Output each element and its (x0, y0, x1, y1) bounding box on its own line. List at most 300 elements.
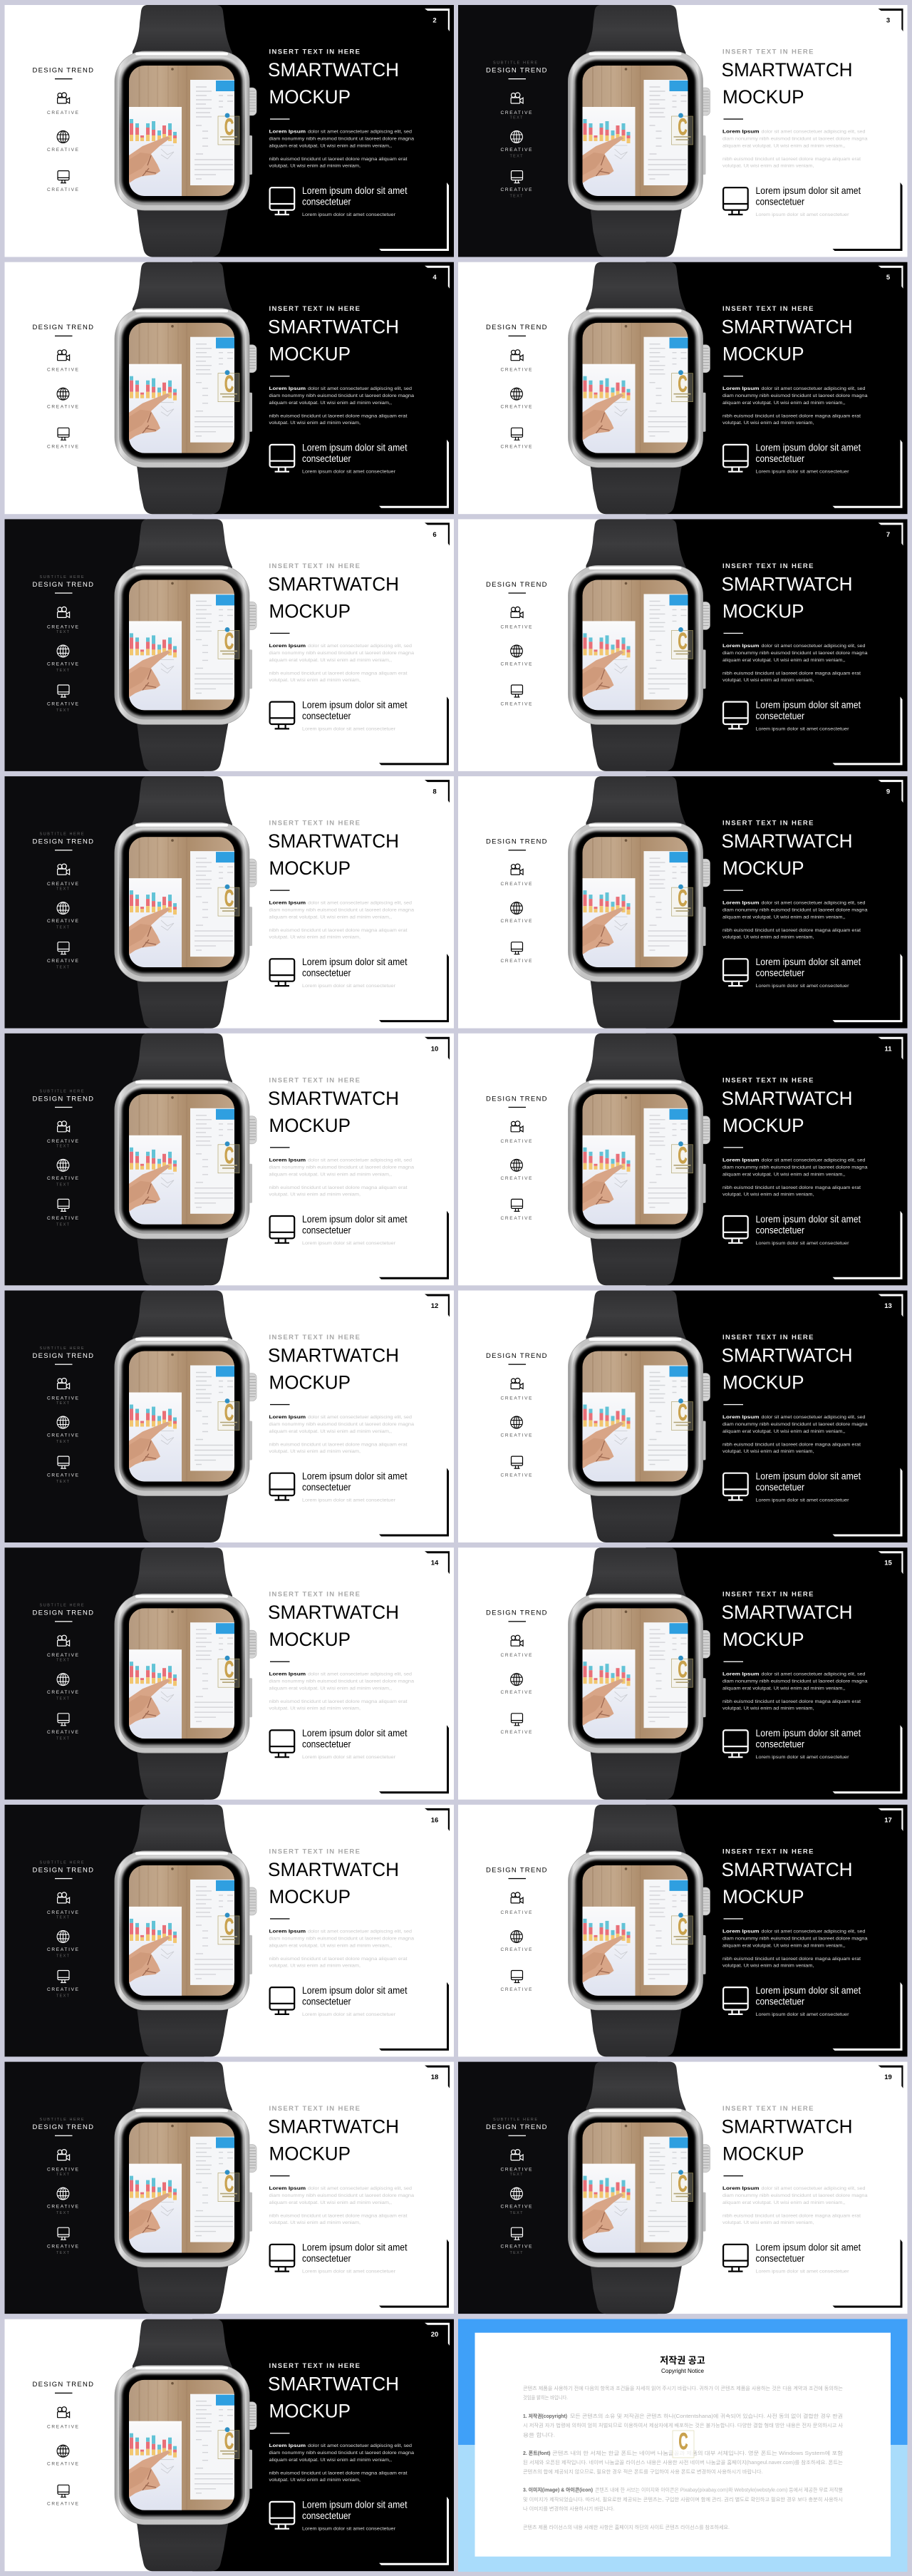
body text (269, 901, 414, 940)
body text: volutpat. Ut wisi enim ad minim veniam, (269, 421, 361, 426)
corner top right (878, 266, 903, 289)
title line 1: SMARTWATCH (268, 830, 399, 852)
title line 1: SMARTWATCH (721, 830, 852, 852)
body text: aliquam erat volutpat. Ut wisi enim ad minim veniam,, (722, 401, 846, 406)
slide background (458, 1805, 908, 2056)
callout: consectetuer (755, 195, 804, 207)
body text (722, 2186, 868, 2225)
intro paragraph (523, 2385, 844, 2401)
icon: video camera (511, 607, 523, 617)
icon: monitor (512, 1199, 523, 1211)
title line 1: SMARTWATCH (721, 1344, 852, 1366)
slide background (4, 519, 454, 771)
page number: 2 (432, 17, 437, 24)
slide 5 (458, 262, 908, 514)
left menu column (33, 833, 93, 970)
logo watermark: C (678, 1657, 687, 1682)
divider (270, 118, 289, 120)
slide background (458, 776, 908, 1029)
icon: video camera (58, 1379, 70, 1389)
body text: diam nonummy nibh euismod tincidunt ut laoreet dolore magna (722, 908, 868, 913)
notice subtitle: Copyright Notice (661, 2367, 704, 2374)
logo watermark: C (678, 2171, 687, 2197)
menu heading: DESIGN TREND (486, 838, 547, 846)
callout (755, 1727, 861, 1760)
title line 2: MOCKUP (722, 600, 804, 622)
body text: Lorem Ipsum (269, 1929, 306, 1934)
callout: Lorem ipsum dolor sit amet consectetuer (302, 984, 396, 989)
menu heading: DESIGN TREND (486, 2123, 547, 2131)
body text: volutpat. Ut wisi enim ad minim veniam, (269, 2220, 361, 2225)
body text: dolor sit amet consectetuer adipiscing elit, sed (308, 1672, 412, 1677)
body text: volutpat. Ut wisi enim ad minim veniam, (269, 1963, 361, 1968)
corner bottom right (832, 696, 902, 765)
logo watermark: C (678, 371, 687, 397)
title line 1: SMARTWATCH (268, 1602, 399, 1623)
logo watermark (671, 1398, 693, 1430)
label: CREATIVE (500, 148, 532, 153)
logo watermark (671, 2170, 693, 2202)
corner bottom right (379, 2497, 449, 2565)
corner bottom right (379, 954, 449, 1022)
menu heading: DESIGN TREND (33, 67, 93, 74)
icon: video camera (58, 2407, 70, 2418)
body text: dolor sit amet consectetuer adipiscing elit, sed (761, 1415, 866, 1420)
title line 2: MOCKUP (722, 344, 804, 365)
slide background (4, 262, 454, 514)
callout: Lorem ipsum dolor sit amet (755, 1470, 861, 1481)
smartwatch illustration (115, 262, 256, 514)
body text: nibh euismod tincidunt ut laoreet dolore magna aliquam erat (722, 1957, 861, 1962)
callout (302, 1213, 408, 1246)
body text (722, 1929, 868, 1968)
callout: consectetuer (755, 967, 804, 979)
label: CREATIVE (47, 624, 79, 629)
slide 15 (458, 1547, 908, 1800)
corner bottom right (832, 1725, 902, 1793)
corner top right (425, 1294, 450, 1317)
logo watermark (671, 1656, 693, 1687)
body text: aliquam erat volutpat. Ut wisi enim ad minim veniam,, (269, 1943, 392, 1948)
title line 1: SMARTWATCH (721, 1859, 852, 1880)
label: CREATIVE (500, 1139, 532, 1144)
left menu column (33, 1860, 93, 1998)
body text: volutpat. Ut wisi enim ad minim veniam, (269, 1706, 361, 1711)
body text: aliquam erat volutpat. Ut wisi enim ad minim veniam,, (722, 658, 846, 663)
body text: diam nonummy nibh euismod tincidunt ut laoreet dolore magna (722, 393, 868, 398)
logo watermark (671, 1913, 693, 1944)
menu heading: DESIGN TREND (33, 1609, 93, 1617)
eyebrow: INSERT TEXT IN HERE (269, 1334, 360, 1341)
section 2: 콘텐츠 내의 한 서체는 한글 폰트는 네이버 나눔글꼴과 제품의 대부 서체입니다. 영문 폰트는 Windows System에 포함 (552, 2450, 844, 2456)
label: CREATIVE (500, 1947, 532, 1952)
label: CREATIVE (500, 1690, 532, 1695)
body text: Lorem Ipsum (269, 386, 306, 391)
body text: Lorem Ipsum (722, 901, 760, 906)
sublabel: TEXT (56, 926, 70, 930)
body text: aliquam erat volutpat. Ut wisi enim ad minim veniam,, (722, 144, 846, 148)
callout: consectetuer (302, 1995, 351, 2006)
slide background (4, 1805, 454, 2056)
smartwatch illustration (115, 519, 256, 771)
menu heading: DESIGN TREND (33, 324, 93, 331)
title line 1: SMARTWATCH (268, 2116, 399, 2138)
callout: Lorem ipsum dolor sit amet (755, 956, 861, 967)
title line 1: SMARTWATCH (268, 573, 399, 594)
sublabel: TEXT (510, 115, 523, 120)
icon: monitor (512, 1456, 523, 1468)
callout: Lorem ipsum dolor sit amet consectetuer (755, 212, 849, 217)
logo watermark: C (678, 2428, 688, 2454)
title line 2: MOCKUP (269, 600, 351, 622)
icon: globe (57, 2445, 69, 2457)
body text: diam nonummy nibh euismod tincidunt ut laoreet dolore magna (269, 1422, 414, 1427)
callout: Lorem ipsum dolor sit amet consectetuer (755, 2270, 849, 2274)
body text: nibh euismod tincidunt ut laoreet dolore magna aliquam erat (269, 414, 408, 419)
divider (509, 2135, 526, 2136)
title line 2: MOCKUP (722, 2143, 804, 2165)
body text: aliquam erat volutpat. Ut wisi enim ad minim veniam,, (269, 1172, 392, 1177)
icon: monitor (58, 171, 69, 183)
icon: monitor large (723, 2245, 748, 2272)
icon: globe (511, 131, 522, 143)
body text: Lorem Ipsum (269, 1158, 306, 1163)
body text: aliquam erat volutpat. Ut wisi enim ad minim veniam,, (269, 2200, 392, 2205)
label: CREATIVE (47, 445, 79, 450)
eyebrow: INSERT TEXT IN HERE (722, 48, 814, 56)
callout: consectetuer (302, 195, 351, 207)
body text: volutpat. Ut wisi enim ad minim veniam, (722, 2220, 814, 2225)
eyebrow: INSERT TEXT IN HERE (269, 2362, 360, 2370)
label: CREATIVE (47, 110, 79, 115)
title line 2: MOCKUP (722, 1886, 804, 1907)
body text: nibh euismod tincidunt ut laoreet dolore magna aliquam erat (269, 1957, 408, 1962)
label: CREATIVE (500, 701, 532, 706)
logo watermark (671, 1141, 693, 1173)
smartwatch illustration (569, 776, 710, 1029)
body text: dolor sit amet consectetuer adipiscing elit, sed (761, 1929, 866, 1934)
menu heading: DESIGN TREND (33, 838, 93, 846)
logo watermark (671, 113, 693, 145)
callout (755, 699, 861, 731)
slide 7 (458, 519, 908, 771)
body text: Lorem Ipsum (722, 1672, 760, 1677)
callout (302, 1984, 408, 2017)
label: CREATIVE (47, 1730, 79, 1735)
subtitle: SUBTITLE HERE (40, 1089, 84, 1093)
page number: 4 (432, 274, 437, 282)
subtitle: SUBTITLE HERE (40, 833, 84, 837)
sublabel: TEXT (56, 2251, 70, 2255)
sublabel: TEXT (56, 669, 70, 673)
body text: nibh euismod tincidunt ut laoreet dolore magna aliquam erat (722, 157, 861, 162)
body text: Lorem Ipsum (722, 130, 760, 134)
icon: video camera (58, 1121, 70, 1132)
menu heading: DESIGN TREND (486, 1609, 547, 1617)
slide 19 (458, 2062, 908, 2314)
logo watermark (218, 627, 239, 659)
icon: globe (57, 388, 69, 400)
body text: dolor sit amet consectetuer adipiscing elit, sed (761, 2186, 866, 2191)
icon: monitor large (723, 445, 748, 472)
callout: Lorem ipsum dolor sit amet (755, 1213, 861, 1225)
slide 10 (4, 1034, 454, 1285)
body text: dolor sit amet consectetuer adipiscing elit, sed (761, 644, 866, 649)
body text: volutpat. Ut wisi enim ad minim veniam, (722, 1963, 814, 1968)
logo watermark (218, 113, 239, 145)
label: CREATIVE (500, 2205, 532, 2210)
icon: globe (511, 645, 522, 657)
divider (509, 1107, 526, 1108)
icon: monitor large (270, 2502, 294, 2529)
slide 6 (4, 519, 454, 771)
body text: volutpat. Ut wisi enim ad minim veniam, (269, 678, 361, 683)
body text: diam nonummy nibh euismod tincidunt ut laoreet dolore magna (269, 2451, 414, 2456)
callout: Lorem ipsum dolor sit amet (755, 442, 861, 453)
callout (302, 2499, 408, 2532)
subtitle: SUBTITLE HERE (493, 2118, 537, 2122)
slide background (458, 519, 908, 771)
smartwatch illustration (115, 1034, 256, 1285)
callout: Lorem ipsum dolor sit amet (302, 185, 408, 196)
callout (302, 442, 408, 475)
logo watermark: C (224, 114, 234, 140)
icon: monitor (512, 171, 523, 183)
page number: 5 (886, 274, 891, 282)
icon: monitor large (270, 187, 294, 215)
divider (509, 78, 526, 79)
body text: nibh euismod tincidunt ut laoreet dolore magna aliquam erat (722, 1443, 861, 1447)
label: CREATIVE (47, 148, 79, 153)
label: CREATIVE (47, 1947, 79, 1952)
icon: video camera (511, 350, 523, 361)
title line 1: SMARTWATCH (268, 1344, 399, 1366)
icon: monitor large (270, 1473, 294, 1500)
slide 20 (4, 2319, 454, 2571)
body text: diam nonummy nibh euismod tincidunt ut laoreet dolore magna (269, 137, 414, 141)
body text: Lorem Ipsum (722, 1158, 760, 1163)
page number: 3 (886, 17, 890, 24)
label: CREATIVE (500, 919, 532, 924)
corner bottom right (832, 1982, 902, 2051)
body text: nibh euismod tincidunt ut laoreet dolore magna aliquam erat (269, 1185, 408, 1190)
slide background (458, 1290, 908, 1542)
slide 11 (458, 1034, 908, 1285)
divider (270, 890, 289, 891)
logo watermark (671, 370, 693, 402)
label: CREATIVE (47, 1653, 79, 1658)
body text: aliquam erat volutpat. Ut wisi enim ad minim veniam,, (269, 1686, 392, 1691)
left menu column (486, 324, 547, 450)
body text: aliquam erat volutpat. Ut wisi enim ad minim veniam,, (722, 915, 846, 920)
logo watermark: C (224, 371, 234, 397)
callout: Lorem ipsum dolor sit amet consectetuer (302, 2270, 396, 2274)
eyebrow: INSERT TEXT IN HERE (722, 562, 814, 570)
callout: consectetuer (302, 967, 351, 979)
divider (724, 1404, 743, 1405)
label: CREATIVE (500, 187, 532, 192)
callout: Lorem ipsum dolor sit amet (302, 1470, 408, 1481)
title line 2: MOCKUP (269, 344, 351, 365)
icon: monitor (58, 685, 69, 697)
label: CREATIVE (47, 1473, 79, 1478)
smartwatch illustration (569, 1547, 710, 1800)
slide 17 (458, 1805, 908, 2056)
label: CREATIVE (47, 368, 79, 373)
callout: Lorem ipsum dolor sit amet consectetuer (302, 1755, 396, 1760)
logo watermark: C (224, 1400, 234, 1426)
callout: Lorem ipsum dolor sit amet (755, 1727, 861, 1738)
panel: copyright notice (458, 2319, 908, 2572)
sublabel: TEXT (510, 2211, 523, 2215)
callout: consectetuer (755, 453, 804, 464)
page number: 20 (431, 2331, 438, 2339)
corner bottom right (832, 954, 902, 1022)
body text: diam nonummy nibh euismod tincidunt ut laoreet dolore magna (269, 2193, 414, 2198)
page number: 12 (431, 1302, 438, 1310)
corner top right (878, 1037, 903, 1060)
notice title: 저작권 공고 (660, 2355, 705, 2366)
page number: 13 (884, 1302, 892, 1310)
smartwatch illustration (115, 2319, 256, 2571)
subtitle: SUBTITLE HERE (40, 1604, 84, 1608)
body text: dolor sit amet consectetuer adipiscing elit, sed (308, 1415, 412, 1420)
menu heading: DESIGN TREND (33, 1095, 93, 1103)
page number: 16 (431, 1816, 438, 1824)
logo watermark (218, 2427, 239, 2459)
closing paragraph: 콘텐츠 제품 라이선스의 내용 사례한 사항은 홈페이지 하단의 사이트 콘텐츠 라이선스를 참조하세요. (523, 2524, 730, 2530)
logo watermark: C (678, 885, 687, 911)
label: CREATIVE (500, 1910, 532, 1915)
icon: video camera (511, 1379, 523, 1389)
right content column (721, 1808, 903, 2051)
title line 2: MOCKUP (269, 1115, 351, 1136)
label: CREATIVE (500, 1987, 532, 1992)
smartwatch illustration (115, 1290, 256, 1542)
slide background (4, 776, 454, 1029)
corner bottom right (379, 2240, 449, 2308)
body text: volutpat. Ut wisi enim ad minim veniam, (722, 1706, 814, 1711)
icon: monitor (58, 2227, 69, 2240)
body text: dolor sit amet consectetuer adipiscing elit, sed (308, 130, 412, 134)
slide 14 (4, 1547, 454, 1800)
label: CREATIVE (47, 1396, 79, 1401)
eyebrow: INSERT TEXT IN HERE (722, 1334, 814, 1341)
icon: monitor large (270, 2245, 294, 2272)
label: CREATIVE (500, 1396, 532, 1401)
body text: Lorem Ipsum (722, 2186, 760, 2191)
label: CREATIVE (47, 959, 79, 964)
icon: monitor large (723, 959, 748, 986)
eyebrow: INSERT TEXT IN HERE (722, 1848, 814, 1855)
callout: consectetuer (302, 453, 351, 464)
body text: diam nonummy nibh euismod tincidunt ut laoreet dolore magna (722, 1679, 868, 1684)
smartwatch illustration (115, 1805, 256, 2056)
divider (270, 1147, 289, 1148)
body text (722, 644, 868, 683)
page number: 7 (886, 531, 890, 539)
page number: 19 (884, 2073, 892, 2081)
page number: 9 (886, 788, 890, 796)
section 1: 용을 합니다. (523, 2432, 555, 2438)
intro paragraph: 콘텐츠 제품을 사용하기 전에 다음의 항목과 조건들을 자세히 읽어 주시기 바랍니다. 귀하가 이 콘텐츠 제품을 사용하는 것은 다음 계약과 조건에 동의하는 (523, 2385, 844, 2391)
title line 1: SMARTWATCH (721, 316, 852, 338)
divider (509, 1364, 526, 1365)
body text: nibh euismod tincidunt ut laoreet dolore magna aliquam erat (269, 2214, 408, 2219)
icon: monitor (512, 2227, 523, 2240)
title line 1: SMARTWATCH (268, 2374, 399, 2395)
body text: volutpat. Ut wisi enim ad minim veniam, (722, 421, 814, 426)
body text (269, 1672, 414, 1711)
corner top right (425, 780, 450, 803)
section 2: 콘텐츠의 합에 제공되지 않으므로, 필요한 경우 적은 폰트를 구입하여 사용 폰트로 변경하여 사용하시기 바랍니다. (523, 2468, 763, 2475)
smartwatch illustration (569, 5, 710, 257)
left menu column (486, 838, 547, 964)
blue backdrop top (458, 2319, 908, 2445)
eyebrow: INSERT TEXT IN HERE (269, 1848, 360, 1855)
label: CREATIVE (47, 405, 79, 410)
icon: monitor large (723, 1473, 748, 1500)
callout (302, 185, 408, 217)
body text: diam nonummy nibh euismod tincidunt ut laoreet dolore magna (722, 1936, 868, 1941)
eyebrow: INSERT TEXT IN HERE (269, 820, 360, 828)
callout: consectetuer (755, 2252, 804, 2264)
label: CREATIVE (500, 445, 532, 450)
title line 2: MOCKUP (269, 2143, 351, 2165)
icon: monitor (58, 1970, 69, 1983)
icon: monitor large (270, 702, 294, 728)
corner top right (425, 1551, 450, 1574)
sublabel: TEXT (510, 194, 523, 198)
slide 13 (458, 1290, 908, 1542)
divider (724, 1661, 743, 1662)
body text (269, 1415, 414, 1454)
body text: diam nonummy nibh euismod tincidunt ut laoreet dolore magna (722, 1422, 868, 1427)
section 1: 시 저작권 자가 법령에 의하여 엄히 처벌되므로 이용하여서 제삼자에게 배포하는 것은 불가능합니다. 다양한 결합 형태 방안 내용은 전자 문의하시고 사 (523, 2422, 844, 2428)
right content column (268, 266, 450, 508)
label: CREATIVE (500, 405, 532, 410)
left menu column (33, 1604, 93, 1741)
logo watermark: C (224, 1657, 234, 1682)
icon: monitor large (723, 1730, 748, 1757)
menu heading: DESIGN TREND (486, 1095, 547, 1103)
callout: Lorem ipsum dolor sit amet (302, 1213, 408, 1225)
section 2: 2. 폰트(font) (523, 2451, 550, 2456)
menu heading: DESIGN TREND (486, 1866, 547, 1874)
icon: monitor (512, 942, 523, 954)
slide background (458, 2062, 908, 2314)
body text: Lorem Ipsum (269, 2443, 306, 2448)
left menu column (486, 1866, 547, 1992)
right content column (721, 1037, 903, 1279)
title line 2: MOCKUP (722, 1371, 804, 1393)
logo watermark: C (678, 1143, 687, 1168)
icon: globe (511, 1930, 522, 1942)
label: CREATIVE (47, 2245, 79, 2250)
right content column (268, 780, 450, 1022)
right content column (268, 2066, 450, 2308)
page number: 17 (884, 1816, 892, 1824)
smartwatch illustration (569, 1805, 710, 2056)
page number: 8 (432, 788, 437, 796)
icon: video camera (511, 1635, 523, 1646)
body text: dolor sit amet consectetuer adipiscing elit, sed (761, 386, 866, 391)
body text: diam nonummy nibh euismod tincidunt ut laoreet dolore magna (722, 2193, 868, 2198)
title line 2: MOCKUP (269, 857, 351, 879)
divider (55, 2135, 73, 2136)
body text: nibh euismod tincidunt ut laoreet dolore magna aliquam erat (722, 928, 861, 933)
right content column (721, 1551, 903, 1793)
